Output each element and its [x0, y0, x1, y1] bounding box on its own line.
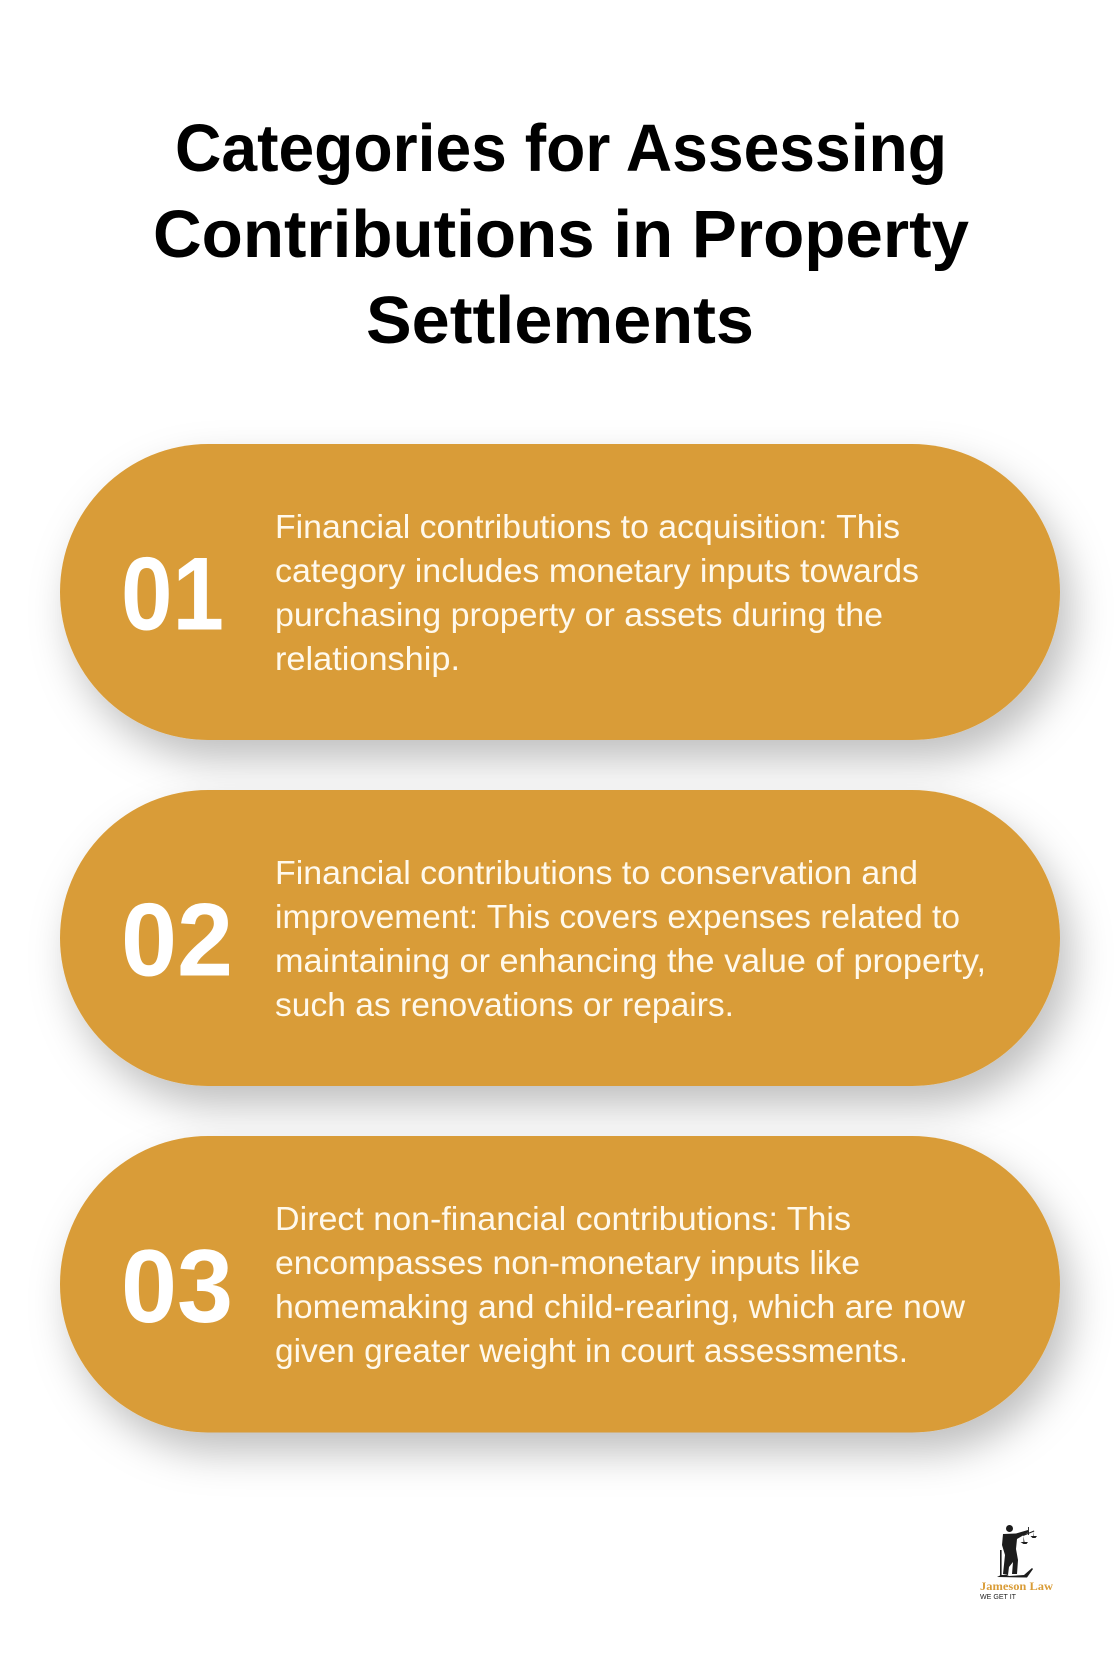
panel: card 03 — [60, 1136, 1060, 1432]
text block: card 03 description: encompasses non-monetary inputs like — [275, 1244, 860, 1281]
text block: card 03 description: homemaking and child-rearing, which are now — [275, 1288, 965, 1325]
text block: card 01 description: Financial contributions to acquisition: This — [275, 508, 900, 545]
title: Settlements — [366, 283, 754, 358]
text block: card 03 description: Direct non-financial contributions: This — [275, 1200, 851, 1237]
text block: card 03 description: given greater weight in court assessments. — [275, 1332, 908, 1369]
text block: card 01 description: category includes monetary inputs towards — [275, 552, 919, 589]
text block: card 01 description: purchasing property or assets during the — [275, 596, 883, 633]
icon: lady justice — [997, 1525, 1037, 1578]
text block: card 01 description: relationship. — [275, 640, 460, 677]
text block: card 03 description — [275, 1200, 965, 1369]
text block: card 02 description: maintaining or enhancing the value of property, — [275, 942, 986, 979]
number 01: 01 — [121, 536, 224, 652]
logo wordmark: Jameson Law — [980, 1579, 1053, 1593]
number 02: 02 — [121, 882, 233, 998]
logo: Jameson Law — [980, 1525, 1053, 1601]
title: Contributions in Property — [153, 197, 969, 272]
title — [153, 111, 969, 358]
text block: card 02 description: such as renovations or repairs. — [275, 986, 734, 1023]
number 03: 03 — [121, 1229, 233, 1345]
panel: card 02 — [60, 790, 1060, 1086]
text block: card 01 description — [275, 508, 919, 677]
text block: card 02 description: Financial contributions to conservation and — [275, 854, 918, 891]
logo tagline: WE GET IT — [980, 1594, 1017, 1601]
text block: card 02 description: improvement: This covers expenses related to — [275, 898, 960, 935]
text block: card 02 description — [275, 854, 986, 1023]
panel: card 01 — [60, 444, 1060, 740]
title: Categories for Assessing — [175, 111, 947, 186]
